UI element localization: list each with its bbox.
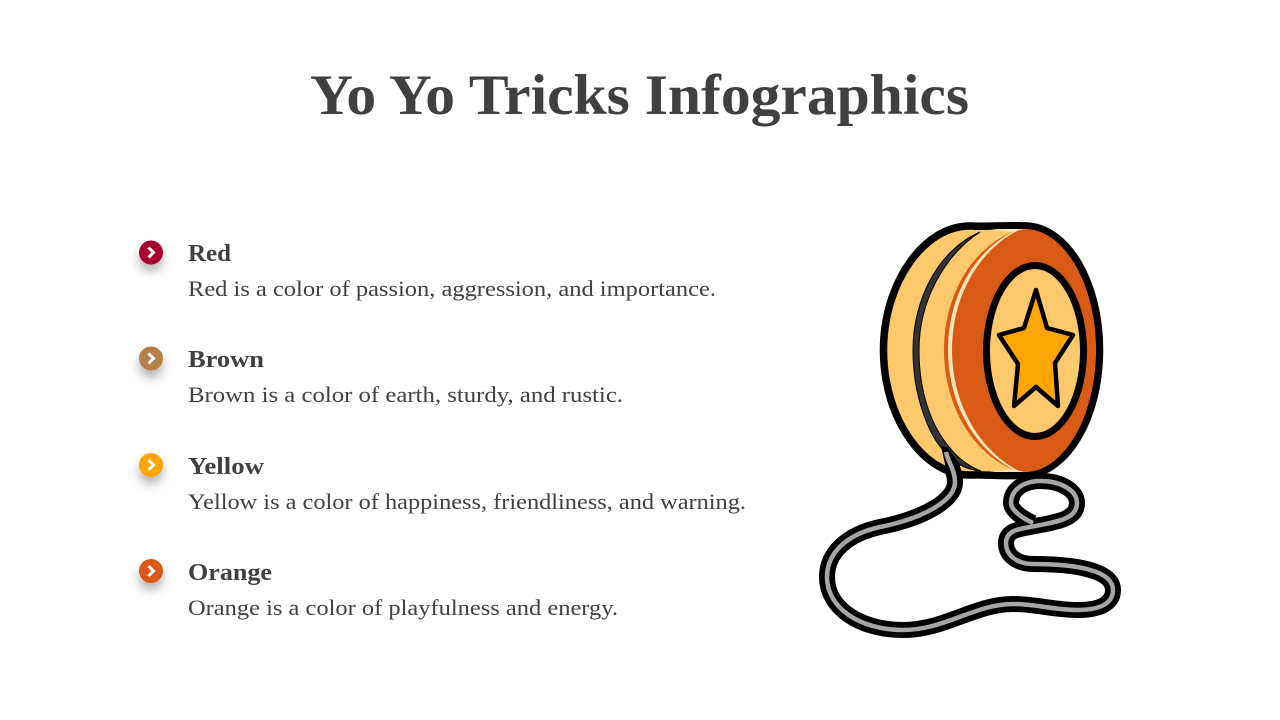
list item: Orange bbox=[139, 559, 618, 620]
list item: Red bbox=[139, 240, 716, 301]
heading: Brown: Brown bbox=[188, 347, 264, 373]
text: Orange description: Orange is a color of playfulness and energy. bbox=[188, 595, 618, 620]
illustration: yo-yo bbox=[827, 226, 1113, 630]
heading: Orange: Orange bbox=[188, 560, 272, 586]
list item: Yellow bbox=[139, 453, 746, 514]
rim orange line bbox=[944, 231, 1014, 470]
icon: orange chevron bullet bbox=[139, 559, 163, 583]
groove bbox=[913, 232, 981, 471]
heading: Yellow: Yellow bbox=[188, 454, 265, 480]
star bbox=[999, 290, 1073, 406]
heading: Red: Red bbox=[188, 241, 232, 267]
yo-yo string bbox=[827, 446, 1113, 630]
text: Yellow description: Yellow is a color of happiness, friendliness, and warning. bbox=[188, 489, 746, 514]
icon: red chevron bullet bbox=[139, 240, 163, 264]
title: Yo Yo Tricks Infographics bbox=[310, 64, 969, 127]
rim highlight bbox=[948, 229, 1028, 472]
text: Brown description: Brown is a color of earth, sturdy, and rustic. bbox=[188, 382, 623, 407]
list item: Brown bbox=[139, 346, 623, 407]
icon: brown chevron bullet bbox=[139, 346, 163, 370]
yo-yo face bbox=[952, 229, 1096, 472]
text: Red description: Red is a color of passion, aggression, and importance. bbox=[188, 276, 716, 301]
inner disc bbox=[986, 266, 1084, 436]
icon: yellow chevron bullet bbox=[139, 453, 163, 477]
yo-yo body bbox=[884, 226, 1100, 476]
